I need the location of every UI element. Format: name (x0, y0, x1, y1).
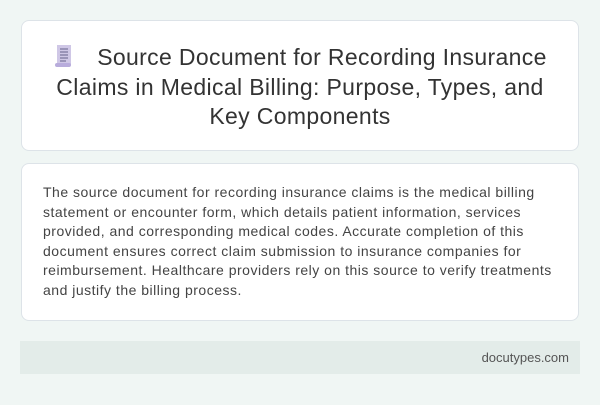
text block: description: The source document for recording insurance claims is the medical billing statement or encounter form, which details patient information, services provided, and corresponding medical codes. Accurate completion of this document ensures correct claim submission to insurance companies for reimbursement. Healthcare providers rely on this source to verify treatments and justify the billing process. (43, 184, 552, 298)
footer text: docutypes.com (482, 350, 569, 365)
panel: description card (21, 163, 579, 321)
icon: document scroll (55, 45, 71, 67)
panel: title card (21, 20, 579, 151)
footer bar (20, 341, 580, 374)
title: Source Document for Recording Insurance Claims in Medical Billing: Purpose, Types, and Key Components (56, 44, 547, 129)
